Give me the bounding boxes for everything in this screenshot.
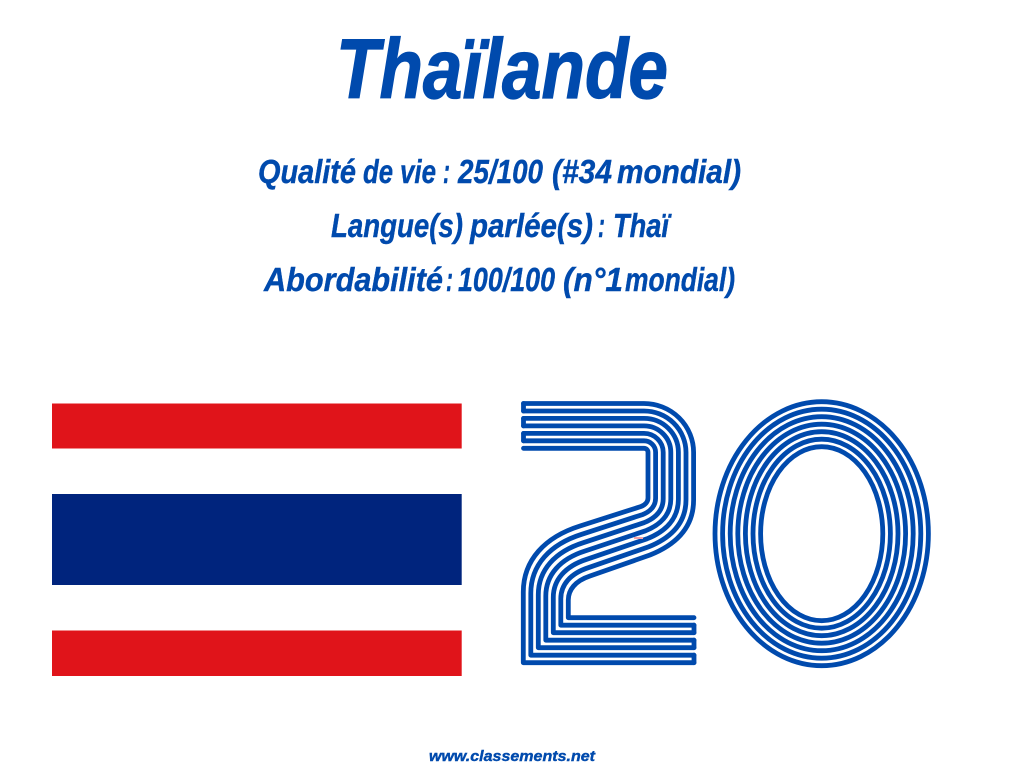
fact: quality of life: Qualité [258,153,356,190]
fact: languages: Langue(s) [331,207,463,244]
title: Thaïlande [336,22,668,116]
icon: flag of Thailand [52,404,462,676]
fact: quality of life: vie [400,153,436,190]
fact: affordability: Abordabilité [263,261,443,298]
rank number 20 [523,402,928,666]
fact: quality of life: 25/100 [457,153,544,190]
fact: quality of life: : [443,153,450,190]
fact: quality of life: (#34 [552,153,612,190]
fact: languages: : [598,207,605,244]
footer website: www.classements.net [429,749,596,765]
digit 0 [715,402,928,666]
fact: quality of life: mondial) [617,153,741,190]
fact: languages: parlée(s) [469,207,593,244]
fact: affordability: (n°1 [563,261,623,298]
fact: affordability: 100/100 [458,261,556,298]
fact: quality of life: de [363,153,393,190]
fact: languages: Thaï [613,207,672,244]
digit 2 [523,404,694,663]
fact: affordability: mondial) [625,261,735,298]
fact: affordability: : [446,261,453,298]
text block: country facts [258,153,741,298]
small pink mark [634,537,643,539]
